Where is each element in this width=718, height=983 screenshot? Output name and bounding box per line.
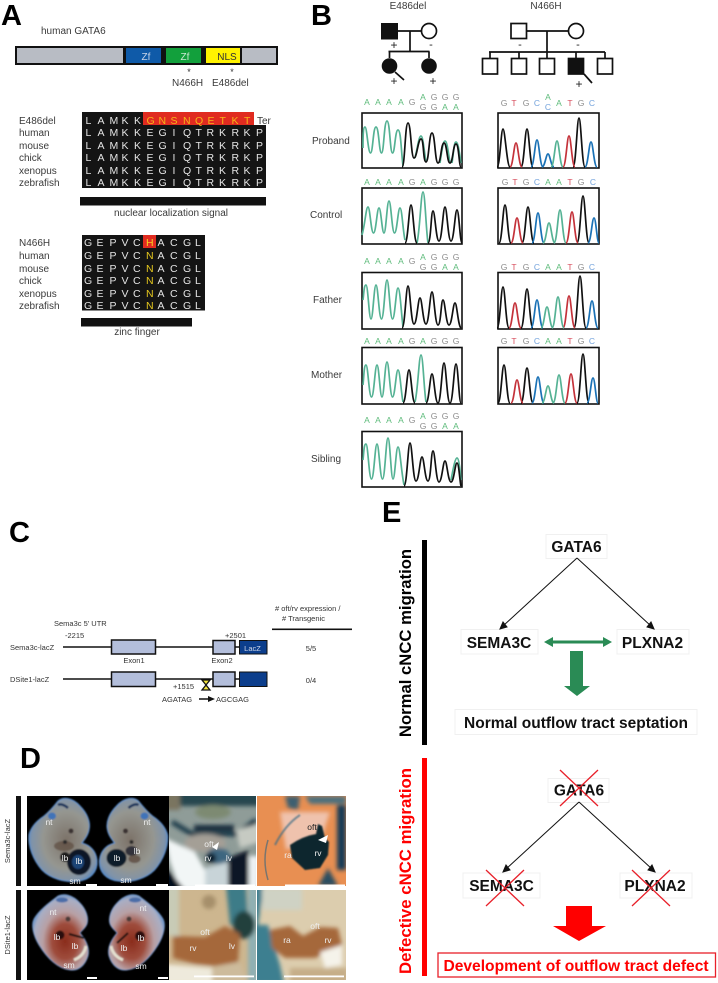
alignment: N466H zinc finger: GEPVC <box>84 275 141 287</box>
diagram: DSite1-lacZ construct: +1515 <box>173 682 194 691</box>
diagram: GATA6 protein domains: NLS <box>217 52 237 63</box>
chromatogram: E486del sibling: AAAA <box>364 415 404 425</box>
alignment: E486del nuclear localization signal: chick <box>19 153 43 164</box>
alignment: N466H zinc finger: N <box>146 263 154 275</box>
chromatogram: N466H mother: A <box>556 336 562 346</box>
chromatogram: N466H mother: T <box>511 336 517 346</box>
diagram: Sema3c-lacZ construct: -2215 <box>65 631 84 640</box>
side label: Normal cNCC migration <box>396 540 427 745</box>
chromatogram: N466H control: G <box>502 177 508 187</box>
chromatogram: N466H mother: T <box>567 336 573 346</box>
photo: DSite1-lacZ whole embryos: lb <box>138 933 145 943</box>
photo: Sema3c-lacZ whole embryos: lb <box>62 853 69 863</box>
chromatogram: E486del mother: A <box>420 336 426 346</box>
diagram: GATA6 protein domains: N466H <box>172 78 203 89</box>
alignment: N466H zinc finger: N <box>146 250 154 262</box>
photo: Sema3c-lacZ heart side view: rv <box>314 848 322 858</box>
label: Sibling: Sibling <box>311 454 341 465</box>
chromatogram: E486del father: AA <box>442 262 459 272</box>
pedigree: N466H family: + <box>575 77 583 91</box>
chromatogram: E486del father: GG <box>420 262 437 272</box>
alignment: N466H zinc finger: ACGL <box>158 263 201 275</box>
panel: B pedigrees and chromatograms <box>310 0 612 487</box>
chromatogram: N466H father: A <box>556 262 562 272</box>
alignment: N466H zinc finger: xenopus <box>19 289 57 300</box>
alignment: E486del nuclear localization signal: Ter <box>257 116 272 127</box>
arrow: green double arrow <box>544 637 612 647</box>
diagram: DSite1-lacZ construct: AGCGAG <box>216 695 249 704</box>
panel: A protein alignment <box>1 0 278 338</box>
diagram: DSite1-lacZ construct <box>10 672 316 704</box>
chromatogram: E486del control: A <box>420 177 426 187</box>
heading: panel letter B: B <box>311 0 332 32</box>
alignment: N466H zinc finger: ACGL <box>158 275 201 287</box>
pedigree: N466H family: N466H <box>530 1 562 12</box>
alignment: N466H zinc finger: GEPVC <box>84 263 141 275</box>
chromatogram: E486del mother: GGG <box>431 336 459 346</box>
photo: Sema3c-lacZ whole embryos: nt <box>45 817 53 827</box>
alignment: N466H zinc finger: GEPVC <box>84 250 141 262</box>
alignment: N466H zinc finger: GEPVC <box>84 288 141 300</box>
chromatogram: N466H control: C <box>534 177 540 187</box>
alignment: N466H zinc finger: human <box>19 251 50 262</box>
diagram: defective pathway: Development of outflow tract defect <box>443 958 709 975</box>
photo: DSite1-lacZ heart front view: rv <box>189 943 197 953</box>
chromatogram: N466H control: C <box>590 177 596 187</box>
chromatogram: E486del father: GGG <box>431 252 459 262</box>
chromatogram: E486del proband: GGG <box>431 92 459 102</box>
heading: panel letter C: C <box>9 517 30 549</box>
chromatogram: E486del sibling: AA <box>442 421 459 431</box>
diagram: Sema3c-lacZ construct: Sema3c 5' UTR <box>54 619 107 628</box>
alignment: E486del nuclear localization signal: LAMKKEGIQTRKRKP <box>86 152 263 164</box>
photo: DSite1-lacZ whole embryos: sm <box>135 961 147 971</box>
pedigree: N466H family: - <box>576 39 580 51</box>
chromatogram: N466H father: G <box>523 262 529 272</box>
alignment: E486del nuclear localization signal: human <box>19 128 50 139</box>
chromatogram: N466H control: G <box>523 177 529 187</box>
chromatogram: N466H mother: G <box>523 336 529 346</box>
alignment: E486del nuclear localization signal: xenopus <box>19 166 57 177</box>
chromatogram: N466H father: A <box>545 262 551 272</box>
row label: DSite1-lacZ: DSite1-lacZ <box>3 915 12 955</box>
photo: DSite1-lacZ whole embryos: lb <box>121 943 128 953</box>
diagram: defective pathway: SEMA3C <box>469 878 534 895</box>
photo: Sema3c-lacZ heart front view: rv <box>204 853 212 863</box>
pedigree: N466H family: - <box>518 39 522 51</box>
pedigree: E486del family <box>382 1 437 88</box>
chromatogram: N466H father: C <box>534 262 540 272</box>
photo: Sema3c-lacZ whole embryos: lb <box>76 856 83 866</box>
photo: DSite1-lacZ heart front view: lv <box>229 941 236 951</box>
chromatogram: N466H mother: C <box>534 336 540 346</box>
alignment: E486del nuclear localization signal: LAMKKEGIQTRKRKP <box>86 127 263 139</box>
chromatogram: N466H father: C <box>589 262 595 272</box>
chromatogram: N466H proband: G <box>578 98 584 108</box>
chromatogram: N466H proband: A <box>556 98 562 108</box>
chromatogram: N466H proband: C <box>545 102 551 112</box>
pedigree: N466H family <box>482 1 612 91</box>
chromatogram: N466H proband: T <box>567 98 573 108</box>
diagram: DSite1-lacZ construct: 0/4 <box>306 676 316 685</box>
chromatogram: E486del proband: GG <box>420 102 437 112</box>
alignment: N466H zinc finger: GEPVC <box>84 300 141 312</box>
chromatogram: N466H proband: C <box>534 98 540 108</box>
photo: Sema3c-lacZ whole embryos: lb <box>114 853 121 863</box>
diagram: GATA6 protein domains: * <box>230 67 234 77</box>
diagram: DSite1-lacZ construct: DSite1-lacZ <box>10 675 50 684</box>
alignment: N466H zinc finger: mouse <box>19 264 49 275</box>
chromatogram: E486del proband: AAAA <box>364 97 404 107</box>
diagram: Sema3c-lacZ construct: +2501 <box>225 631 246 640</box>
chromatogram: E486del sibling: GGG <box>431 411 459 421</box>
row label: Sema3c-lacZ: Sema3c-lacZ <box>3 818 12 863</box>
diagram: GATA6 protein domains: E486del <box>212 78 249 89</box>
chromatogram: N466H father: G <box>501 262 507 272</box>
pedigree: E486del family: + <box>390 38 398 52</box>
diagram: GATA6 protein domains: Zf <box>142 52 151 63</box>
diagram: normal pathway: Normal outflow tract septation <box>464 715 688 732</box>
photo: Sema3c-lacZ heart side view: oft <box>307 822 317 832</box>
chromatogram: N466H proband: G <box>501 98 507 108</box>
chromatogram: E486del father: G <box>409 256 415 266</box>
diagram: Sema3c-lacZ construct: Exon2 <box>211 656 233 665</box>
chromatogram: E486del sibling <box>362 411 462 487</box>
photo: DSite1-lacZ whole embryos: sm <box>63 960 75 970</box>
chromatogram: E486del mother: AAAA <box>364 336 404 346</box>
chromatogram: E486del mother <box>362 336 462 404</box>
alignment: E486del nuclear localization signal: LAMKKEGIQTRKRKP <box>86 140 263 152</box>
diagram: normal pathway: GATA6 <box>551 539 602 556</box>
alignment: N466H zinc finger: N <box>146 300 154 312</box>
alignment: E486del nuclear localization signal: LAMKK <box>86 115 141 127</box>
photo: DSite1-lacZ whole embryos: lb <box>54 932 61 942</box>
diagram: defective pathway: PLXNA2 <box>624 878 686 895</box>
pedigree: E486del family: E486del <box>390 1 426 12</box>
chromatogram: E486del control: GGG <box>431 177 459 187</box>
photo: Sema3c-lacZ whole embryos: lb <box>134 846 141 856</box>
photo: Sema3c-lacZ heart front view: oft <box>204 839 214 849</box>
photo: Sema3c-lacZ whole embryos: sm <box>120 875 132 885</box>
chromatogram: N466H father <box>497 262 599 329</box>
chromatogram: N466H proband: G <box>523 98 529 108</box>
chromatogram: N466H mother: C <box>589 336 595 346</box>
diagram: GATA6 protein domains: * <box>187 67 191 77</box>
chromatogram: E486del proband: A <box>420 92 426 102</box>
panel: E pathway model <box>382 497 716 977</box>
row label: Sema3c-lacZ <box>3 796 21 886</box>
arrow: red down arrow <box>553 906 606 941</box>
alignment: N466H zinc finger: ACGL <box>158 288 201 300</box>
panel: C transgene constructs <box>9 517 352 704</box>
table header: expression counts <box>272 604 352 630</box>
pedigree: E486del family: - <box>429 39 433 51</box>
table header: expression counts: # Transgenic <box>282 614 325 623</box>
chromatogram: N466H proband: A <box>545 92 551 102</box>
photo: Sema3c-lacZ whole embryos <box>27 796 169 886</box>
chromatogram: E486del control <box>362 177 462 244</box>
text: human GATA6: human GATA6 <box>41 26 106 37</box>
chromatogram: E486del mother: G <box>409 336 415 346</box>
photo: Sema3c-lacZ whole embryos: nt <box>143 817 151 827</box>
label: Father: Father <box>313 295 343 306</box>
photo: Sema3c-lacZ heart front view: lv <box>226 853 233 863</box>
chromatogram: E486del proband: AA <box>442 102 459 112</box>
diagram: DSite1-lacZ construct: AGATAG <box>162 695 192 704</box>
chromatogram: E486del control: AAAA <box>364 177 404 187</box>
label: Mother: Mother <box>311 370 343 381</box>
side label: Normal cNCC migration: Normal cNCC migration <box>396 549 415 737</box>
photo: DSite1-lacZ whole embryos: nt <box>49 907 57 917</box>
chromatogram: E486del father: A <box>420 252 426 262</box>
photo: Sema3c-lacZ whole embryos: sm <box>69 876 81 886</box>
panel: D embryo photographs <box>3 743 348 983</box>
diagram: normal pathway: SEMA3C <box>467 635 531 652</box>
alignment: N466H zinc finger: ACGL <box>158 300 201 312</box>
diagram: Sema3c-lacZ construct: 5/5 <box>306 644 316 653</box>
chromatogram: E486del father: AAAA <box>364 256 404 266</box>
photo: DSite1-lacZ heart front view <box>169 890 256 980</box>
table header: expression counts: # oft/rv expression / <box>275 604 341 613</box>
alignment: N466H zinc finger: ACGL <box>158 250 201 262</box>
alignment: E486del nuclear localization signal <box>19 112 272 219</box>
label: Proband: Proband <box>312 136 350 147</box>
chromatogram: N466H proband: T <box>511 98 517 108</box>
photo: DSite1-lacZ heart side view: ra <box>283 935 291 945</box>
chromatogram: N466H control: T <box>567 177 573 187</box>
photo: DSite1-lacZ whole embryos <box>27 890 169 980</box>
diagram: Sema3c-lacZ construct <box>10 619 316 665</box>
alignment: E486del nuclear localization signal: zebrafish <box>19 178 60 189</box>
photo: Sema3c-lacZ heart side view: ra <box>284 850 292 860</box>
chromatogram: N466H father: G <box>578 262 584 272</box>
arrow: green down arrow <box>564 651 590 696</box>
photo: DSite1-lacZ heart front view: oft <box>200 927 210 937</box>
label: Control: Control <box>310 210 342 221</box>
chromatogram: N466H control <box>498 177 599 244</box>
alignment: E486del nuclear localization signal: LAMKKEGIQTRKRKP <box>86 165 263 177</box>
chromatogram: N466H mother: G <box>501 336 507 346</box>
alignment: E486del nuclear localization signal: GNSNQETKT <box>146 115 251 127</box>
heading: panel letter E: E <box>382 497 401 529</box>
alignment: N466H zinc finger: N <box>146 288 154 300</box>
row label: DSite1-lacZ <box>3 890 21 980</box>
chromatogram: N466H mother: A <box>545 336 551 346</box>
chromatogram: N466H father: T <box>511 262 517 272</box>
chromatogram: N466H father: T <box>567 262 573 272</box>
side label: Defective cNCC migration: Defective cNCC migration <box>396 768 415 974</box>
side label: Defective cNCC migration <box>396 758 427 976</box>
photo: DSite1-lacZ heart side view <box>257 890 346 980</box>
alignment: N466H zinc finger: zinc finger <box>114 327 160 338</box>
alignment: N466H zinc finger: chick <box>19 276 43 287</box>
alignment: N466H zinc finger: zebrafish <box>19 301 60 312</box>
heading: panel letter A: A <box>1 0 22 32</box>
chromatogram: N466H mother: G <box>578 336 584 346</box>
alignment: N466H zinc finger: N <box>146 275 154 287</box>
diagram: Sema3c-lacZ construct: Exon1 <box>123 656 145 665</box>
heading: panel letter D: D <box>20 743 41 775</box>
chromatogram: E486del sibling: G <box>409 415 415 425</box>
alignment: E486del nuclear localization signal: mouse <box>19 141 49 152</box>
chromatogram: E486del proband: G <box>409 97 415 107</box>
diagram: defective pathway: GATA6 <box>554 782 604 800</box>
diagram: Sema3c-lacZ construct: LacZ <box>244 644 261 653</box>
chromatogram: N466H mother <box>498 336 599 404</box>
icon: red crosses <box>486 770 670 906</box>
diagram: normal pathway: PLXNA2 <box>622 635 683 652</box>
diagram: defective pathway <box>438 770 716 977</box>
photo: DSite1-lacZ whole embryos: nt <box>139 903 147 913</box>
chromatogram: N466H control: A <box>556 177 562 187</box>
photo: Sema3c-lacZ heart side view <box>257 796 346 886</box>
photo: Sema3c-lacZ heart front view <box>169 796 256 886</box>
photo: DSite1-lacZ whole embryos: lb <box>72 941 79 951</box>
diagram: GATA6 protein domains <box>15 46 278 89</box>
chromatogram: E486del father <box>362 252 462 329</box>
alignment: E486del nuclear localization signal: LAMKKEGIQTRKRKP <box>86 177 263 189</box>
photo: DSite1-lacZ heart side view: oft <box>310 921 320 931</box>
chromatogram: N466H proband <box>497 92 599 168</box>
alignment: E486del nuclear localization signal: E486del <box>19 116 56 127</box>
alignment: N466H zinc finger <box>19 235 205 338</box>
alignment: N466H zinc finger: H <box>146 237 154 249</box>
alignment: E486del nuclear localization signal: nuclear localization signal <box>114 208 228 219</box>
chromatogram: E486del sibling: A <box>420 411 426 421</box>
diagram: Sema3c-lacZ construct: Sema3c-lacZ <box>10 643 55 652</box>
chromatogram: E486del control: G <box>409 177 415 187</box>
alignment: N466H zinc finger: N466H <box>19 238 50 249</box>
chromatogram: N466H control: A <box>545 177 551 187</box>
diagram: normal pathway <box>455 534 697 734</box>
photo: DSite1-lacZ heart side view: rv <box>324 935 332 945</box>
chromatogram: N466H control: G <box>578 177 584 187</box>
chromatogram: E486del sibling: GG <box>420 421 437 431</box>
chromatogram: N466H control: T <box>512 177 518 187</box>
pedigree: E486del family: + <box>429 74 437 88</box>
chromatogram: E486del proband <box>362 92 462 168</box>
alignment: N466H zinc finger: ACGL <box>158 237 201 249</box>
alignment: N466H zinc finger: GEPVC <box>84 237 141 249</box>
chromatogram: N466H proband: C <box>589 98 595 108</box>
pedigree: E486del family: + <box>390 74 398 88</box>
diagram: GATA6 protein domains: Zf <box>181 52 190 63</box>
